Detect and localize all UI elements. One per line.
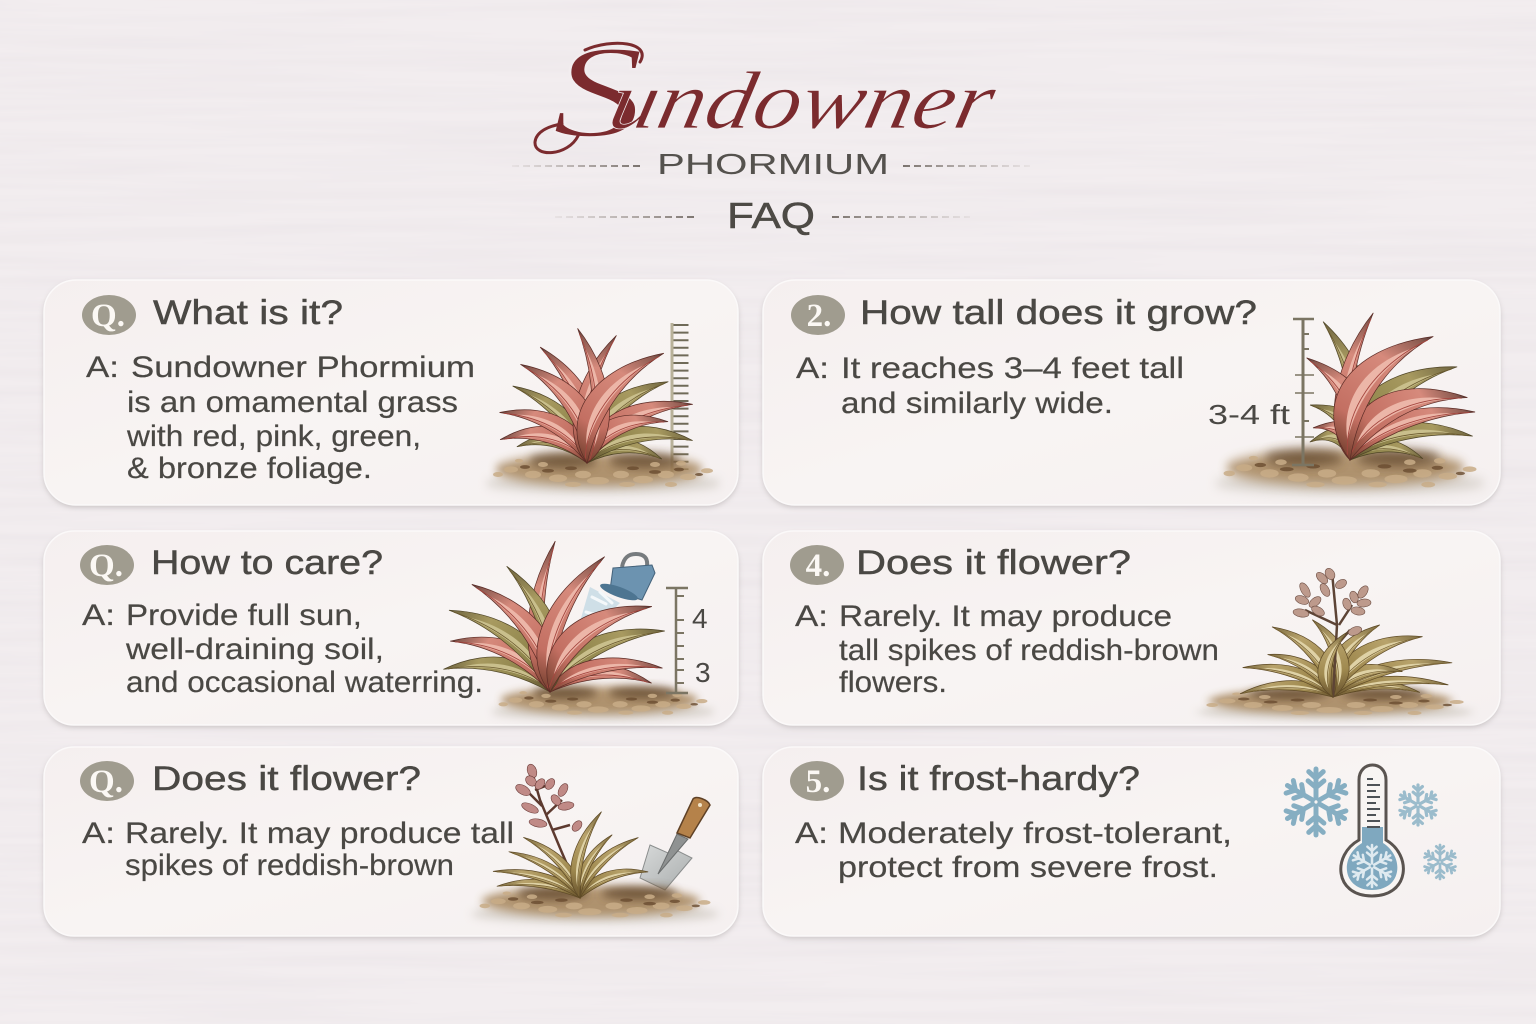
icon: sundowner plant <box>443 540 665 692</box>
icon: height ruler <box>1292 319 1314 465</box>
question badge <box>82 295 136 335</box>
scale number 3: 3 <box>695 657 711 688</box>
answer text <box>795 600 1219 699</box>
icon: flowering plant <box>1240 567 1452 697</box>
title block <box>512 18 1030 236</box>
title: Sundowner <box>535 18 1004 165</box>
answer text: A: <box>82 599 115 632</box>
answer text: and occasional waterring. <box>126 666 483 699</box>
panel: how to care <box>44 531 738 727</box>
panel: frost hardy <box>763 747 1500 938</box>
icon: small snowflake <box>1423 845 1457 879</box>
answer text: with red, pink, green, <box>126 420 421 453</box>
number badge: 4. <box>806 548 830 584</box>
subtitle: PHORMIUM: PHORMIUM <box>657 149 889 181</box>
answer text: & bronze foliage. <box>127 452 372 485</box>
question heading: Does it flower? <box>152 760 421 798</box>
answer text <box>82 817 514 882</box>
icon: soil mound <box>485 453 721 493</box>
panel: does it flower <box>44 747 738 938</box>
icon: flowering plant <box>493 763 648 898</box>
icon: sundowner plant <box>500 326 693 463</box>
answer text: Moderately frost-tolerant, <box>838 817 1232 850</box>
icon: soil mound <box>1197 688 1473 720</box>
question heading: How tall does it grow? <box>860 294 1257 332</box>
icon: sundowner plant <box>1307 309 1475 460</box>
question heading: Does it flower? <box>856 544 1131 582</box>
question heading: What is it? <box>153 294 343 332</box>
question badge <box>80 761 134 801</box>
answer text: Rarely. It may produce <box>839 600 1172 633</box>
ruler label: 3-4 ft <box>1208 399 1290 430</box>
icon: garden trowel <box>640 798 710 890</box>
icon: height ruler <box>672 323 681 472</box>
answer text: spikes of reddish-brown <box>125 849 454 882</box>
panel: how tall <box>763 280 1500 507</box>
question heading: How to care? <box>151 544 383 582</box>
number badge <box>790 761 844 801</box>
number badge: 5. <box>806 764 830 800</box>
answer text: is an omamental grass <box>127 386 458 419</box>
title: Sundowner: undowner <box>602 55 1004 146</box>
answer text: A: <box>795 600 828 633</box>
answer text: tall spikes of reddish-brown <box>839 634 1219 667</box>
answer text: Sundowner Phormium <box>131 351 475 384</box>
icon: large snowflake <box>1283 769 1349 835</box>
question badge: Q. <box>89 764 123 800</box>
question badge <box>80 545 134 585</box>
icon: soil mound <box>491 686 715 720</box>
answer text: A: <box>82 817 115 850</box>
icon: water spray <box>577 587 620 632</box>
icon: height scale <box>666 588 688 693</box>
title: Sundowner: S <box>552 18 644 165</box>
answer text: A: <box>86 351 119 384</box>
answer text: A: <box>795 817 828 850</box>
answer text <box>795 817 1232 884</box>
answer text: Provide full sun, <box>126 599 362 632</box>
answer text <box>86 351 475 485</box>
question heading: Is it frost-hardy? <box>857 760 1140 798</box>
question badge: Q. <box>91 298 125 334</box>
answer text: flowers. <box>839 666 947 699</box>
question badge: Q. <box>89 548 123 584</box>
number badge <box>791 295 845 335</box>
icon: soil mound <box>1214 450 1486 494</box>
number badge <box>790 545 844 585</box>
number badge: 2. <box>807 298 831 334</box>
answer text <box>796 352 1184 420</box>
heading: FAQ: FAQ <box>727 195 815 236</box>
scale number 4: 4 <box>692 603 708 634</box>
icon: soil mound <box>471 886 719 923</box>
icon: medium snowflake <box>1398 785 1438 825</box>
panel: what is it <box>44 280 738 507</box>
icon: thermometer <box>1341 765 1403 896</box>
answer text: protect from severe frost. <box>838 851 1218 884</box>
answer text: A: <box>796 352 829 385</box>
answer text: Rarely. It may produce tall <box>125 817 514 850</box>
answer text: It reaches 3–4 feet tall <box>841 352 1184 385</box>
answer text: and similarly wide. <box>841 387 1113 420</box>
answer text <box>82 599 483 699</box>
answer text: well-draining soil, <box>125 633 384 666</box>
panel: does it flower (numbered) <box>763 531 1500 727</box>
icon: watering can <box>598 554 655 604</box>
